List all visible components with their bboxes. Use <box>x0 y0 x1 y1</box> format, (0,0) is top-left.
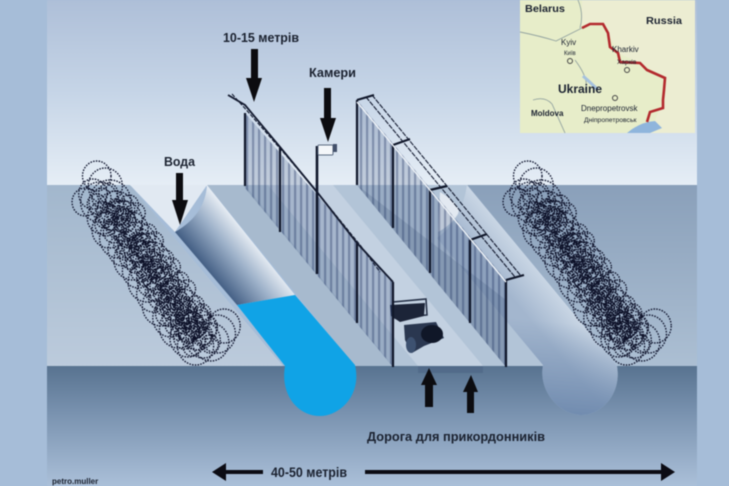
road shadow <box>418 366 483 373</box>
left canal <box>130 185 356 416</box>
canal end shading <box>437 185 618 415</box>
right canal <box>437 185 618 415</box>
arrow: road right <box>463 375 478 413</box>
map inset: Ukraine <box>558 82 602 96</box>
white bank <box>130 185 207 232</box>
vehicle body <box>404 322 444 353</box>
map inset <box>520 0 695 133</box>
map inset: Київ <box>564 51 576 57</box>
arrow right part <box>365 463 675 481</box>
Russia tint <box>582 0 695 133</box>
vehicle wheels <box>421 325 443 343</box>
vehicle <box>390 299 444 353</box>
near fence <box>228 94 393 367</box>
right razor wire coil <box>503 161 671 365</box>
pole <box>316 146 318 274</box>
border road zone <box>245 185 617 366</box>
left razor wire coil <box>72 161 240 365</box>
white lens <box>438 192 459 232</box>
lower band <box>47 366 697 486</box>
top rails <box>366 95 521 277</box>
arrow: 10-15 metres <box>246 49 262 102</box>
map inset: Дніпропетровськ <box>584 116 636 124</box>
fence panels <box>245 113 393 367</box>
far fence <box>357 95 524 367</box>
fence panels <box>357 100 506 367</box>
map inset: Харків <box>617 58 637 66</box>
border line <box>582 24 665 122</box>
sea <box>627 121 662 133</box>
shadow on panels <box>357 185 506 367</box>
map land <box>520 0 695 133</box>
label: water: Вода <box>164 154 196 169</box>
map inset: Moldova <box>531 109 564 118</box>
label: 10-15 metres: 10-15 метрів <box>223 30 299 45</box>
width arrow: 40-50 metres <box>212 463 675 481</box>
razor wire top <box>228 95 393 282</box>
ground right <box>467 185 697 366</box>
map labels: Belarus <box>525 3 565 15</box>
arrow left part <box>212 463 263 481</box>
camera pole <box>317 144 337 274</box>
post arms <box>357 95 524 280</box>
arrow: cameras <box>320 88 336 142</box>
vehicle cab <box>390 303 425 322</box>
vehicle roof frame <box>393 299 427 318</box>
posts <box>357 100 506 367</box>
map inset: Kyiv <box>561 38 576 47</box>
water <box>237 295 356 416</box>
label: cameras: Камери <box>309 65 356 80</box>
canal wall <box>175 185 295 305</box>
canal wall <box>437 185 618 415</box>
arrow: water <box>172 173 188 225</box>
map inset: Russia <box>646 15 682 27</box>
label: border guard road: Дорога для прикордонників <box>367 429 545 444</box>
credit: petro.muller: petro.muller <box>52 477 98 486</box>
posts <box>245 113 393 367</box>
camera head <box>318 145 333 155</box>
background sky <box>47 0 697 186</box>
ground left <box>47 185 283 366</box>
map inset: Kharkiv <box>612 45 639 54</box>
strip between canal and left fence <box>207 185 393 366</box>
rivers and borders <box>520 0 586 133</box>
road surface <box>268 185 483 366</box>
map inset: Dnepropetrovsk <box>581 104 638 113</box>
dnipro <box>583 76 598 90</box>
label: 40-50 metres: 40-50 метрів <box>271 464 347 480</box>
arrow: road left <box>421 368 437 407</box>
